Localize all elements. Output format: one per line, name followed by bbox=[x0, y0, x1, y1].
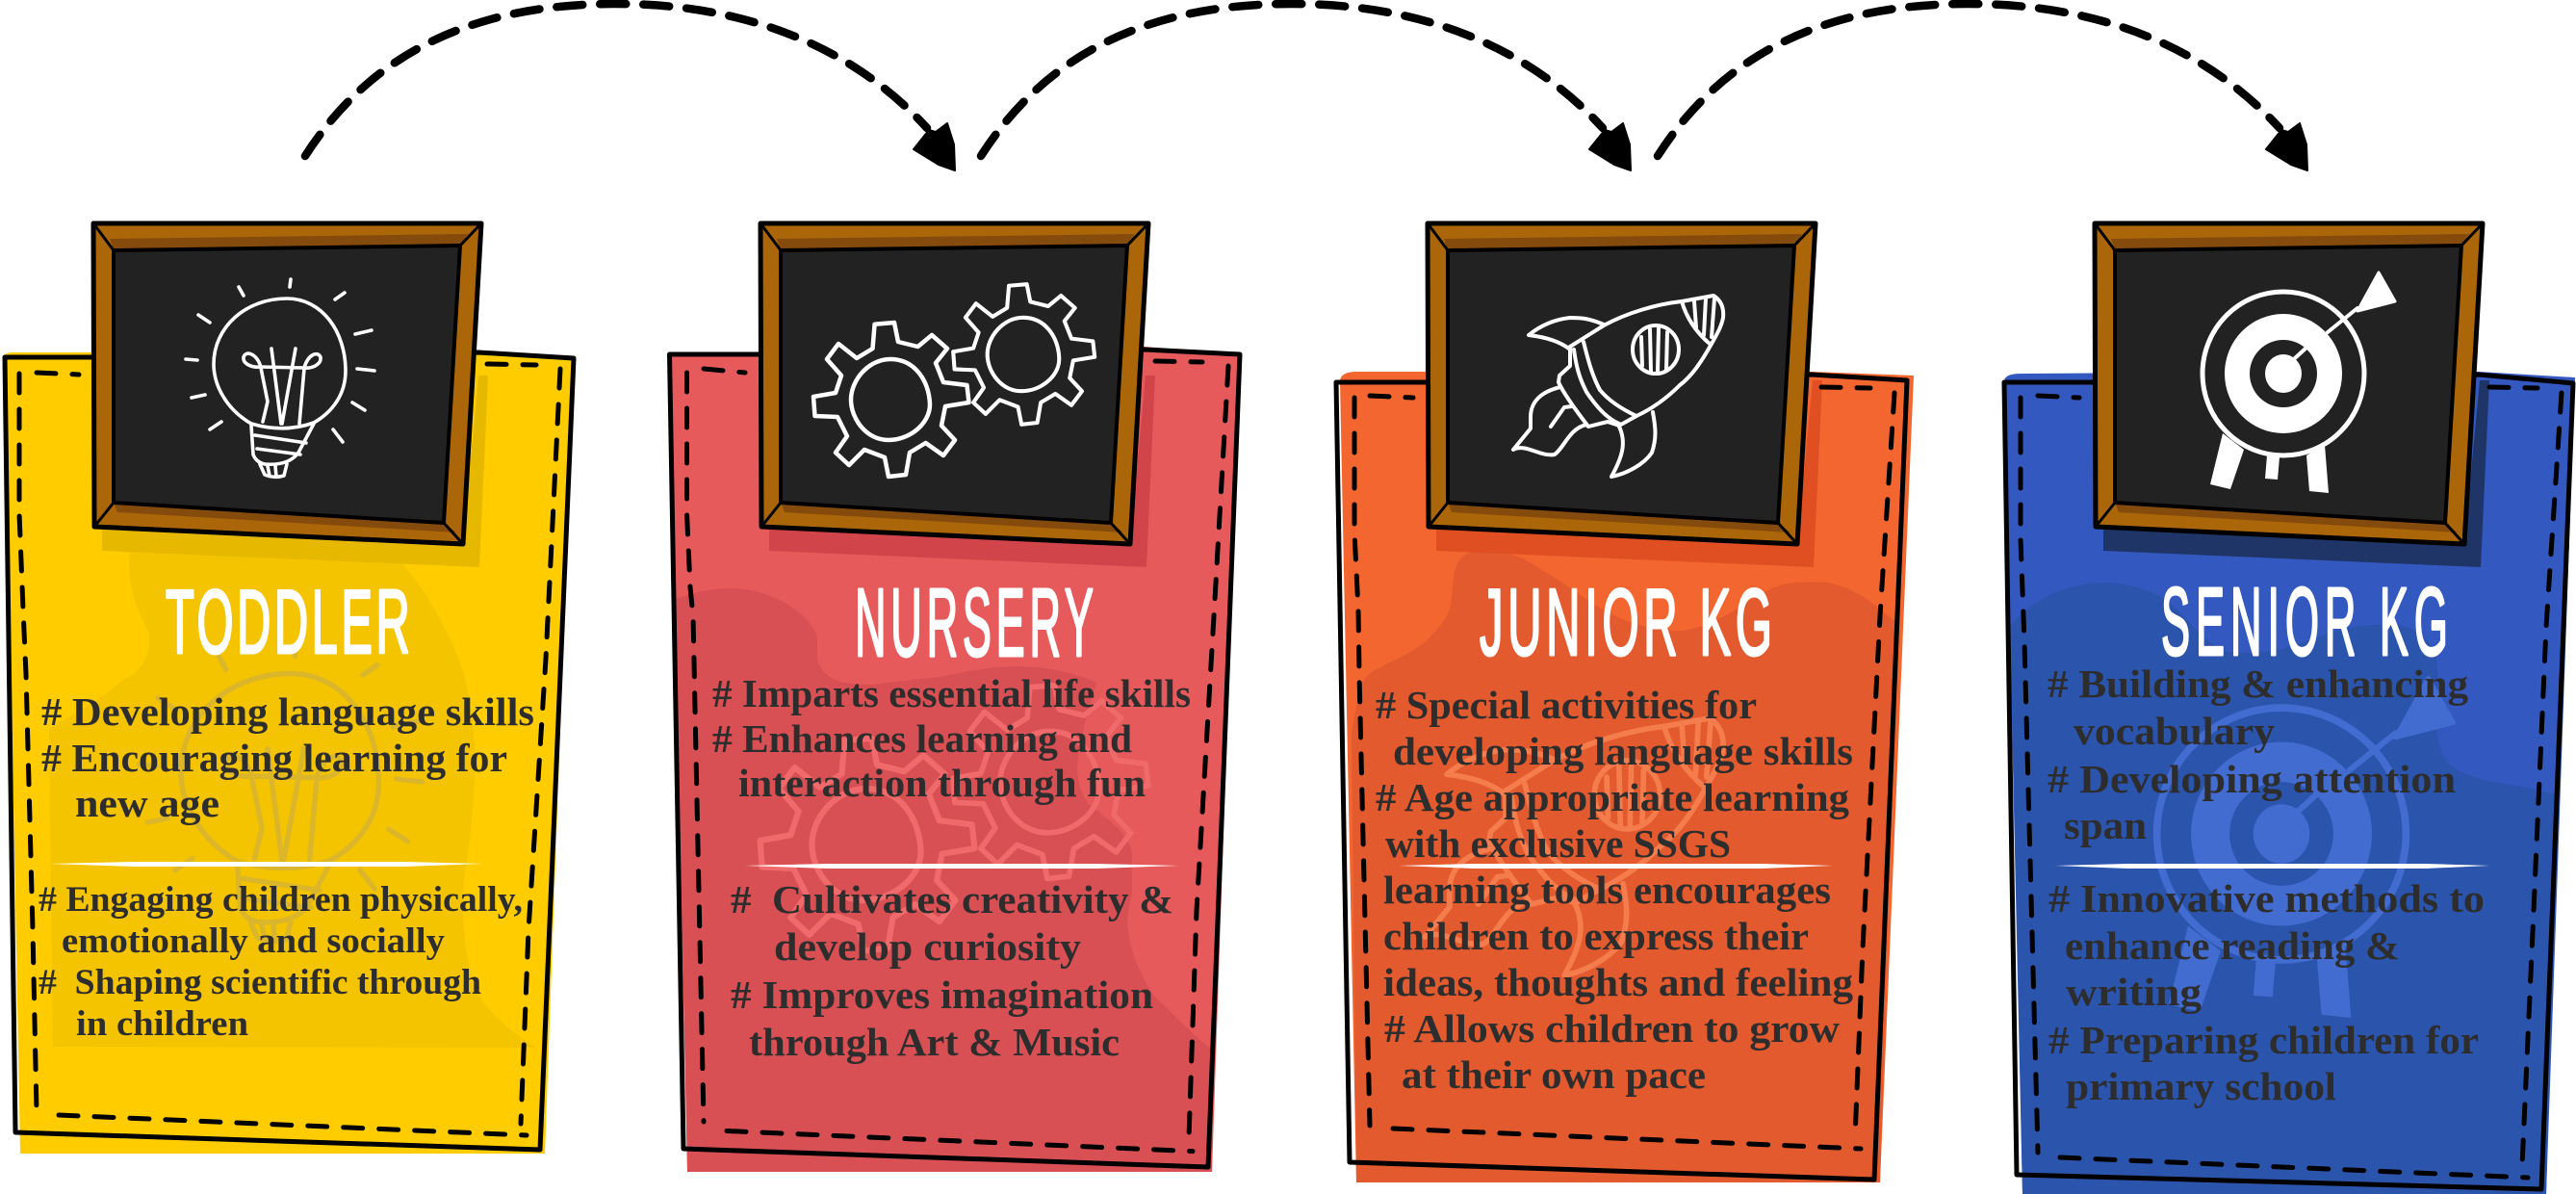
text block: lower points: primary school bbox=[2066, 1064, 2336, 1108]
text block: lower points: # Innovative methods to bbox=[2048, 876, 2485, 921]
heading: toddler: TODDLER bbox=[166, 571, 410, 672]
stitching bbox=[2021, 387, 2562, 1178]
arrow: junior KG to senior KG bbox=[1658, 4, 2307, 170]
text block: upper points bbox=[2048, 662, 2469, 847]
card background bbox=[1340, 372, 1914, 1182]
text block: points: # Special activities for bbox=[1376, 683, 1757, 727]
divider bbox=[2055, 864, 2489, 869]
text block: lower points: in children bbox=[76, 1004, 248, 1044]
card outline bbox=[670, 350, 1240, 1167]
heading: junior KG: JUNIOR KG bbox=[1480, 571, 1772, 676]
frame shadow bbox=[2103, 380, 2489, 567]
card outline bbox=[5, 352, 574, 1150]
text block: upper points: # Imparts essential life skills bbox=[712, 671, 1191, 715]
text block: lower points: # Engaging children physically, bbox=[39, 880, 523, 920]
text block: upper points bbox=[712, 671, 1191, 805]
divider bbox=[745, 864, 1178, 869]
watermark icon: rocket bbox=[1425, 718, 1723, 975]
icon: gears bbox=[813, 284, 1095, 477]
panel: senior KG bbox=[2004, 223, 2575, 1194]
text block: upper points bbox=[41, 689, 534, 825]
text block: upper points: vocabulary bbox=[2074, 709, 2276, 753]
text block: upper points: # Encouraging learning for bbox=[41, 736, 507, 780]
chalkboard frame bbox=[1428, 223, 1816, 544]
text block: upper points: span bbox=[2064, 803, 2147, 847]
card background bbox=[3, 350, 574, 1154]
divider bbox=[49, 862, 483, 867]
watermark icon: target bbox=[2157, 678, 2454, 1018]
text block: points: ideas, thoughts and feeling bbox=[1383, 960, 1854, 1004]
panel: junior KG bbox=[1336, 223, 1914, 1182]
card outline bbox=[1336, 375, 1907, 1180]
frame shadow bbox=[1436, 380, 1822, 567]
text block: points: at their own pace bbox=[1402, 1052, 1706, 1097]
divider bbox=[1399, 864, 1833, 869]
stitching bbox=[1354, 387, 1894, 1149]
text block: points bbox=[1376, 683, 1854, 1097]
icon: target bbox=[2202, 273, 2395, 493]
chalkboard frame bbox=[2095, 223, 2483, 544]
icon: light bulb bbox=[186, 279, 374, 477]
watermark icon: gears bbox=[760, 686, 1148, 950]
text block: upper points: # Building & enhancing bbox=[2048, 662, 2469, 706]
text block: upper points: # Developing attention bbox=[2048, 757, 2456, 801]
stitching bbox=[19, 364, 560, 1135]
text block: lower points: # Preparing children for bbox=[2048, 1018, 2479, 1062]
heading: senior KG: SENIOR KG bbox=[2161, 569, 2448, 676]
text block: lower points: enhance reading & bbox=[2065, 923, 2400, 968]
frame shadow bbox=[769, 376, 1155, 567]
text block: points: learning tools encourages bbox=[1383, 868, 1831, 912]
text block: lower points: writing bbox=[2066, 970, 2202, 1014]
arrow: nursery to junior KG bbox=[981, 4, 1631, 170]
card background bbox=[669, 347, 1240, 1172]
text block: lower points bbox=[731, 877, 1173, 1064]
heading: nursery: NURSERY bbox=[855, 570, 1094, 677]
icon: rocket bbox=[1513, 296, 1723, 477]
card outline bbox=[2004, 375, 2573, 1189]
text block: lower points: through Art & Music bbox=[749, 1020, 1120, 1064]
card background bbox=[2004, 372, 2575, 1194]
background blob bbox=[2011, 583, 2558, 1194]
watermark icon: light bulb bbox=[139, 645, 422, 941]
frame shadow bbox=[102, 376, 488, 567]
text block: lower points: develop curiosity bbox=[774, 924, 1082, 969]
text block: points: # Age appropriate learning bbox=[1376, 775, 1850, 819]
panel: toddler bbox=[3, 223, 574, 1154]
chalkboard frame bbox=[760, 223, 1148, 544]
background blob bbox=[1352, 552, 1896, 1182]
text block: lower points: # Improves imagination bbox=[731, 973, 1153, 1017]
text block: upper points: # Enhances learning and bbox=[712, 716, 1132, 761]
text block: points: with exclusive SSGS bbox=[1385, 821, 1731, 866]
text block: points: # Allows children to grow bbox=[1384, 1006, 1840, 1051]
text block: lower points: # Shaping scientific through bbox=[39, 963, 481, 1002]
text block: upper points: new age bbox=[75, 781, 219, 825]
text block: lower points: emotionally and socially bbox=[62, 921, 446, 961]
panel: nursery bbox=[669, 223, 1240, 1172]
text block: lower points bbox=[2048, 876, 2485, 1108]
stitching bbox=[687, 361, 1228, 1152]
text block: lower points bbox=[39, 880, 523, 1044]
background blob bbox=[49, 532, 536, 1048]
arrow: toddler to nursery bbox=[305, 4, 955, 170]
text block: points: developing language skills bbox=[1393, 729, 1853, 773]
text block: upper points: interaction through fun bbox=[738, 761, 1146, 805]
text block: upper points: # Developing language skills bbox=[41, 689, 534, 734]
chalkboard frame bbox=[93, 223, 481, 544]
text block: lower points: # Cultivates creativity & bbox=[731, 877, 1173, 921]
text block: points: children to express their bbox=[1383, 914, 1809, 958]
background blob bbox=[676, 588, 1214, 1172]
